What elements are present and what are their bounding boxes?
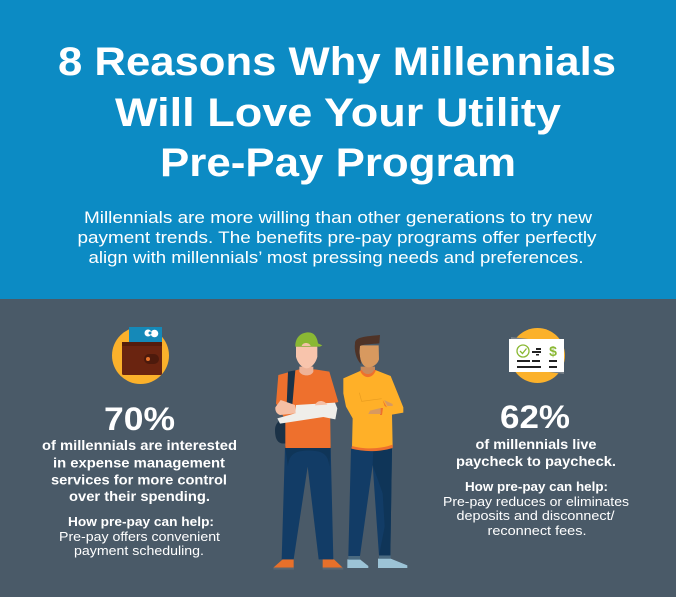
left statistic description: services for more control [51,472,227,488]
icon: wallet and card [112,327,169,384]
left how pre-pay can help [59,514,220,558]
intro text [78,209,597,267]
title: Will Love Your Utility [115,91,562,135]
right how pre-pay can help: How pre-pay can help: [465,479,608,494]
illustration: two millennials [273,332,407,570]
right statistic description: of millennials live [476,436,597,452]
right how pre-pay can help: Pre-pay reduces or eliminates [443,494,630,509]
left statistic description [42,437,237,504]
right statistic: 62% [500,399,570,435]
right how pre-pay can help: deposits and disconnect/ [456,508,615,523]
left how pre-pay can help: payment scheduling. [74,543,204,558]
left how pre-pay can help: Pre-pay offers convenient [59,529,220,544]
intro text: align with millennials’ most pressing needs and preferences. [88,249,584,267]
right how pre-pay can help: reconnect fees. [488,523,586,538]
man in yellow sweater [343,335,407,568]
left statistic description: over their spending. [69,488,210,504]
icon: pay check [509,328,565,383]
header panel [0,0,676,299]
icon: pay check: $ [549,343,557,359]
left how pre-pay can help: How pre-pay can help: [68,514,214,529]
title: Pre-Pay Program [160,141,516,185]
right statistic description: paycheck to paycheck. [456,453,616,469]
right how pre-pay can help [443,479,630,538]
man with green cap [273,332,343,570]
right statistic [443,399,630,538]
title: 8 Reasons Why Millennials [58,40,616,84]
intro text: payment trends. The benefits pre-pay programs offer perfectly [78,229,597,247]
left statistic: 70% [104,401,175,437]
left statistic description: in expense management [53,454,225,470]
intro text: Millennials are more willing than other generations to try new [84,209,592,227]
left statistic [42,401,237,558]
left statistic description: of millennials are interested [42,437,237,453]
title [58,40,616,185]
right statistic description [456,436,616,469]
